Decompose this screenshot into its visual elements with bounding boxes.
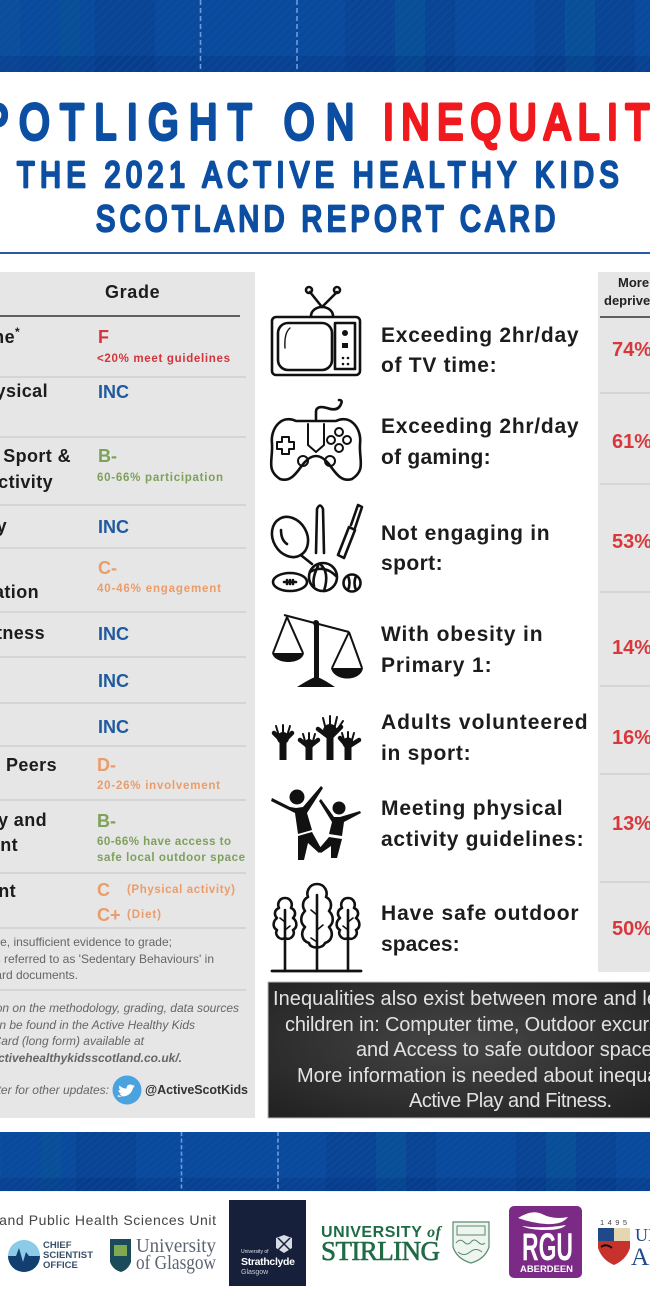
row: community and environment [0, 810, 245, 864]
subtitle line 1: THE 2021 ACTIVE HEALTHY KIDS [17, 154, 619, 195]
logo: strathclyde: Glasgow [241, 1269, 269, 1276]
row: active transportation: 40-46% engagement [97, 583, 221, 595]
row: family and peers [0, 755, 220, 792]
logo: university of glasgow: University [136, 1235, 216, 1257]
label: obesity [381, 623, 543, 677]
icon: raised hands [274, 716, 359, 760]
row: community and environment: B- [97, 811, 116, 831]
twitter line: @ActiveScotKids [145, 1083, 248, 1097]
logo: university of aberdeen: 1495 [600, 1218, 627, 1227]
callout text [273, 988, 650, 1112]
row: government: C [97, 880, 110, 900]
row: organised sport: 60-66% participation [97, 472, 223, 484]
footnote: grade key [0, 935, 214, 982]
column heading: more deprived: More [618, 275, 649, 290]
label: guidelines [381, 797, 584, 851]
row: organised sport: B- [98, 446, 117, 466]
footnote: more information [0, 1001, 239, 1065]
logo: strathclyde: Strathclyde [241, 1256, 295, 1268]
logo: university of stirling: STIRLING [321, 1236, 440, 1266]
logo: rgu aberdeen: ABERDEEN [520, 1264, 573, 1275]
label: tv [381, 324, 579, 377]
header rule [0, 252, 650, 254]
logo: strathclyde: University of [241, 1249, 269, 1255]
logo: chief scientist office: SCIENTIST [43, 1250, 93, 1261]
row: active transportation [0, 558, 221, 602]
row: screen time: * [15, 325, 20, 339]
table heading: grade: Grade [105, 282, 160, 302]
label: outdoor: spaces: [381, 933, 460, 956]
label: outdoor: Have safe outdoor [381, 902, 579, 925]
label: sport: sport: [381, 552, 443, 575]
row: overall physical activity [0, 381, 129, 402]
row: screen time: F [98, 327, 109, 347]
row: government: C+ [97, 905, 121, 925]
row: government: (Diet) [127, 909, 161, 921]
row: physical fitness [0, 623, 129, 644]
title line: spotlight on inequalities: ON [284, 93, 354, 150]
subtitle line 2: SCOTLAND REPORT CARD [96, 198, 555, 239]
bottom tartan band [0, 1132, 650, 1191]
label: sport: Not engaging in [381, 522, 550, 545]
top tartan band [0, 0, 650, 72]
label: volunteered [381, 711, 588, 765]
row: government [0, 880, 235, 925]
label: gaming: Exceeding 2hr/day [381, 415, 579, 438]
icon: sports equipment [265, 505, 362, 592]
row: organised sport [0, 446, 223, 492]
label: obesity: Primary 1: [381, 654, 492, 677]
icon: television [272, 287, 360, 375]
row: screen time [0, 325, 230, 365]
logo: university of stirling [321, 1222, 489, 1266]
row: screen time: <20% meet guidelines [97, 353, 230, 365]
row: active play [0, 516, 129, 537]
logo: rgu aberdeen [509, 1206, 582, 1278]
column heading: more deprived [604, 275, 650, 308]
label: volunteered: Adults volunteered [381, 711, 588, 734]
row: inc: INC [98, 671, 129, 691]
row: community and environment: safe local outdoor space [97, 852, 245, 864]
callout text: Active Play and Fitness. [409, 1090, 612, 1112]
icon: twitter bird [112, 1076, 142, 1104]
row: overall physical activity: INC [98, 382, 129, 402]
logo: university of glasgow: of Glasgow [136, 1252, 216, 1274]
logos row [0, 1200, 650, 1286]
logo: university of stirling: UNIVERSITY of [321, 1224, 443, 1241]
label: volunteered: in sport: [381, 742, 471, 765]
label: tv: of TV time: [381, 354, 497, 377]
title line: spotlight on inequalities [0, 93, 650, 150]
icon: trees [272, 884, 361, 971]
row: family and peers: D- [97, 755, 116, 775]
logo: strathclyde [229, 1200, 306, 1286]
logo: university of aberdeen [598, 1218, 650, 1271]
panel: more deprived percentages [598, 272, 650, 972]
title block [0, 93, 650, 239]
label: sport [381, 522, 550, 575]
icon: balance scales [272, 615, 363, 687]
logo: rgu aberdeen: RGU [522, 1226, 573, 1269]
logo: university of glasgow [110, 1235, 216, 1274]
blackboard callout [268, 982, 650, 1118]
label: gaming [381, 415, 579, 469]
row: active transportation: C- [98, 558, 117, 578]
logo: chief scientist office: OFFICE [43, 1260, 78, 1271]
label: gaming: of gaming: [381, 446, 491, 469]
row: family and peers: 20-26% involvement [97, 780, 220, 792]
row: active play: INC [98, 517, 129, 537]
logo: chief scientist office [8, 1240, 93, 1272]
icon: game controller [271, 400, 361, 480]
label: obesity: With obesity in [381, 623, 543, 646]
label: guidelines: Meeting physical [381, 797, 563, 820]
row: inc second: INC [98, 717, 129, 737]
label: outdoor [381, 902, 579, 956]
icon: jumping children [271, 786, 361, 860]
row: community and environment: 60-66% have access to [97, 836, 231, 848]
panel: grades table [0, 272, 255, 1118]
row: physical fitness: INC [98, 624, 129, 644]
label: guidelines: activity guidelines: [381, 828, 584, 851]
logo: chief scientist office: CHIEF [43, 1240, 72, 1251]
row: government: (Physical activity) [127, 884, 235, 896]
label: tv: Exceeding 2hr/day [381, 324, 579, 347]
twitter line [0, 1076, 248, 1104]
